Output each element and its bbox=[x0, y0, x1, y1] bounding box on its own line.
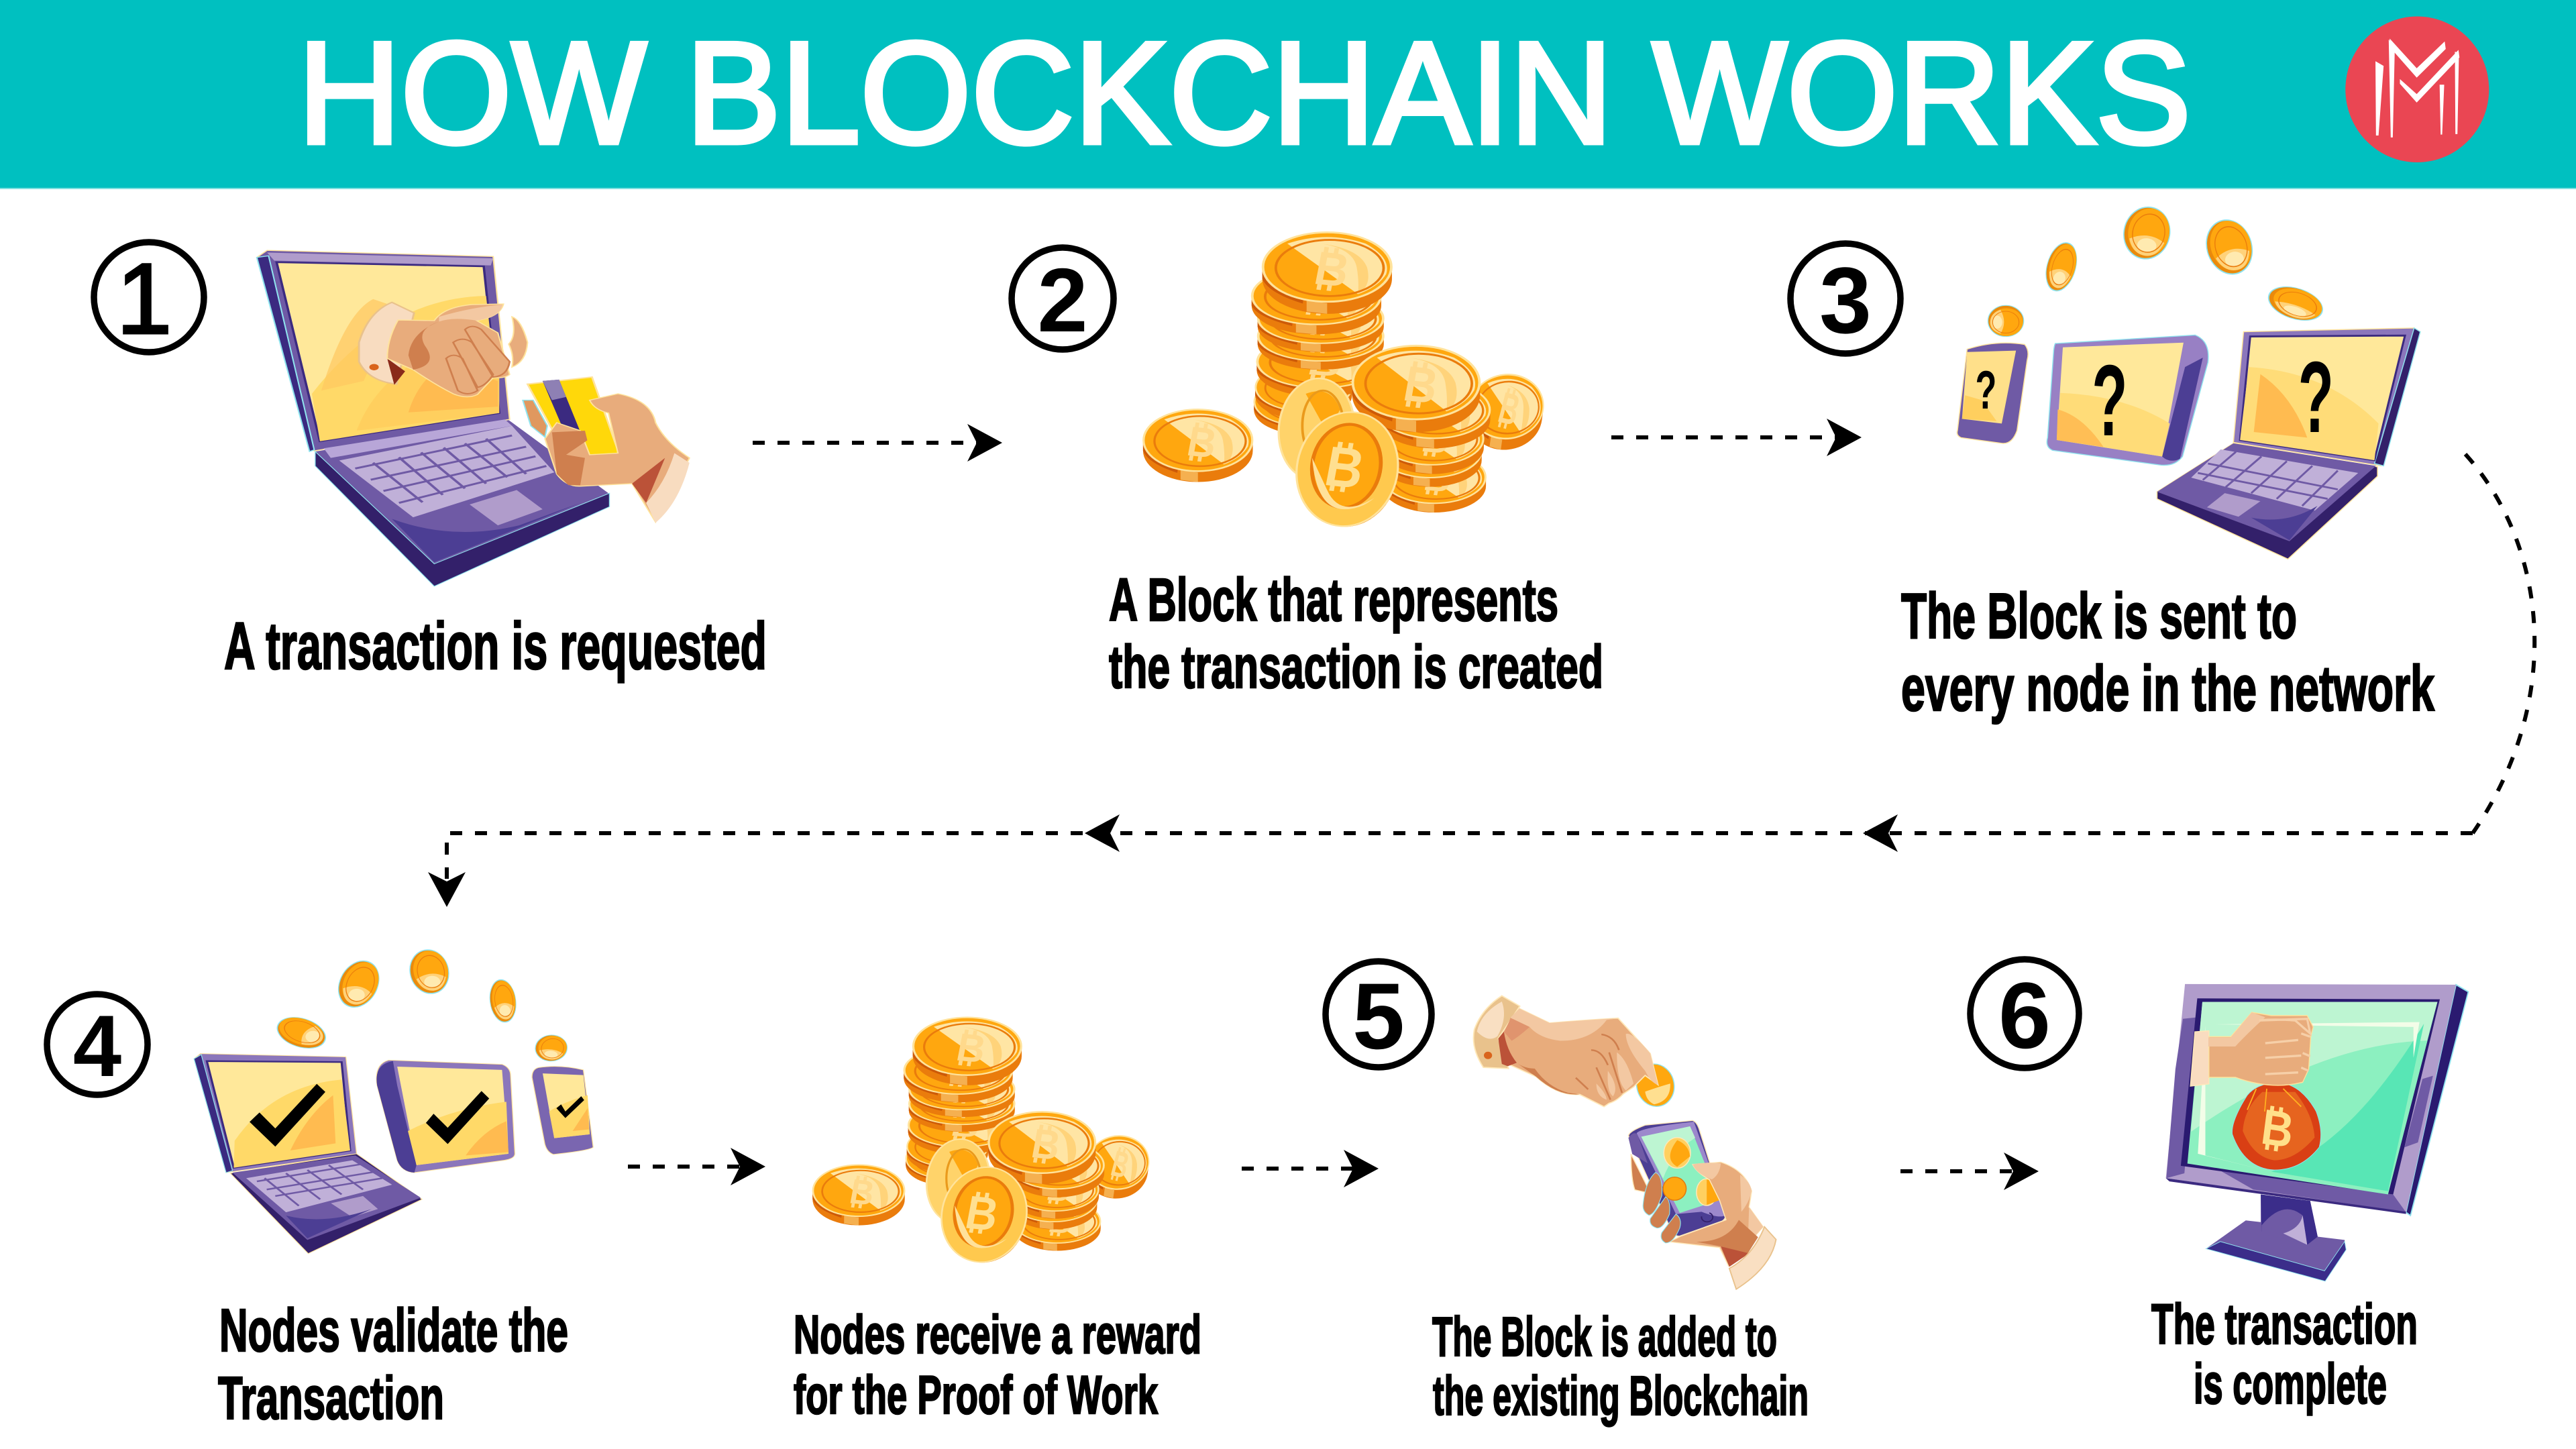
caption: step 3 bbox=[1901, 580, 2434, 724]
caption: step 4: Nodes validate the bbox=[219, 1297, 568, 1364]
caption: step 2: the transaction is created bbox=[1109, 634, 1603, 701]
step 2 number: 2 bbox=[1037, 250, 1088, 351]
icon: laptop with hands and card bbox=[257, 250, 690, 586]
coins arc bbox=[1988, 205, 2327, 337]
caption: step 2: A Block that represents bbox=[1109, 567, 1558, 634]
step 3 number: 3 bbox=[1819, 248, 1872, 353]
step 3 number bbox=[1790, 244, 1900, 354]
step 4 number: 4 bbox=[73, 997, 121, 1095]
step 1 number: 1 bbox=[116, 242, 172, 355]
icon: hand dropping coin onto phone bbox=[1474, 996, 1776, 1289]
caption: step 6: is complete bbox=[2194, 1352, 2387, 1415]
icon: phone, tablet and laptop with question marks bbox=[1957, 205, 2420, 559]
step 4 number bbox=[47, 994, 148, 1095]
step 6 number: 6 bbox=[1998, 963, 2051, 1068]
arrow: long return path from step 3 to step 4 bbox=[428, 454, 2534, 907]
arrow: step 1 to 2 bbox=[753, 424, 1002, 462]
caption: step 1: A transaction is requested bbox=[224, 608, 767, 683]
icon: phone, tablet and laptop with question marks: ? bbox=[1975, 360, 1996, 420]
step 1 number bbox=[94, 242, 204, 355]
header band bbox=[0, 0, 2576, 189]
caption: step 5: The Block is added to bbox=[1432, 1305, 1777, 1368]
caption: step 3: The Block is sent to bbox=[1901, 580, 2297, 652]
arrow: step 2 to 3 bbox=[1611, 419, 1862, 456]
caption: reward bbox=[794, 1305, 1201, 1426]
title: HOW BLOCKCHAIN WORKS bbox=[298, 11, 2191, 174]
step 2 number bbox=[1012, 248, 1114, 351]
step 5 number: 5 bbox=[1352, 963, 1405, 1069]
caption: step 5 bbox=[1432, 1305, 1809, 1427]
icon: reward bitcoin stack bbox=[812, 1018, 1152, 1265]
caption: step 6 bbox=[2151, 1293, 2418, 1415]
icon: bitcoin stack bbox=[1143, 232, 1548, 530]
icon: phone, tablet and laptop with question marks: ? bbox=[2298, 341, 2334, 454]
arrow: reward to step 5 bbox=[1242, 1150, 1379, 1187]
step 5 number bbox=[1326, 961, 1432, 1069]
icon: laptop, tablet and phone with check marks bbox=[194, 949, 593, 1254]
icon: monitor with hand holding bitcoin bag bbox=[2166, 984, 2468, 1281]
caption: step 5: the existing Blockchain bbox=[1433, 1364, 1809, 1427]
icon: monitor with hand holding bitcoin bag: B bbox=[2258, 1099, 2297, 1159]
caption: reward: Nodes receive a reward bbox=[794, 1305, 1201, 1365]
caption: step 4: Transaction bbox=[218, 1365, 444, 1432]
step 6 number bbox=[1970, 959, 2079, 1068]
caption: step 2 bbox=[1109, 567, 1603, 701]
arrow: step 4 to reward bbox=[628, 1148, 765, 1185]
caption: reward: for the Proof of Work bbox=[794, 1365, 1159, 1426]
caption: step 4 bbox=[218, 1297, 568, 1432]
caption: step 6: The transaction bbox=[2151, 1293, 2418, 1356]
arrow: step 5 to 6 bbox=[1900, 1152, 2039, 1190]
logo: MM monogram bbox=[2345, 17, 2489, 162]
coins arc bbox=[270, 949, 570, 1063]
icon: phone, tablet and laptop with question marks: ? bbox=[2092, 345, 2127, 458]
